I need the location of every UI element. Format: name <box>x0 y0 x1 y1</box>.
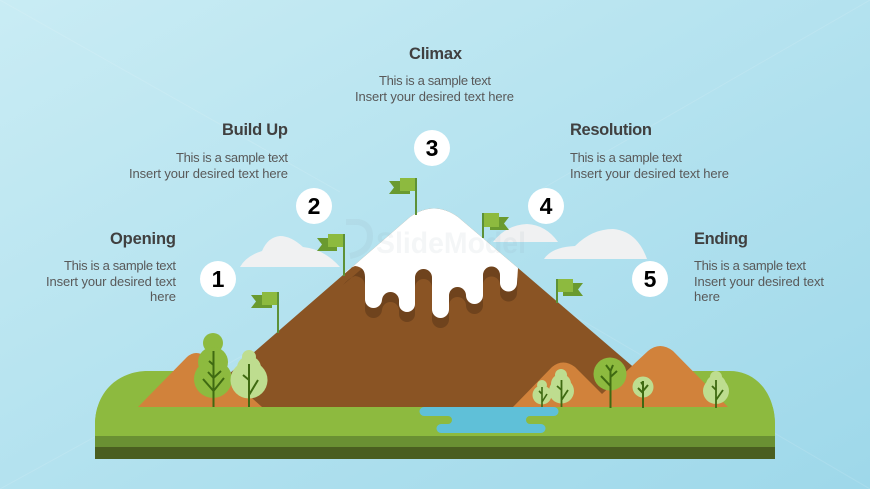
tree 5 <box>594 358 626 408</box>
text: Build Up: Insert your desired text here <box>129 166 288 181</box>
text: Ending: here <box>694 289 720 304</box>
number 5: 5 <box>644 266 657 292</box>
text: Resolution: This is a sample text <box>570 150 682 165</box>
flag 2 <box>317 234 345 276</box>
lake <box>420 407 558 433</box>
grass <box>95 407 775 424</box>
text: Climax: Insert your desired text here <box>355 89 514 104</box>
flag 4 <box>482 213 509 238</box>
ground <box>95 407 775 459</box>
watermark: SlideModel <box>376 227 526 260</box>
cloud left <box>240 236 340 267</box>
tree 6 <box>632 376 654 408</box>
number 3: 3 <box>426 135 438 161</box>
text: Opening: Opening <box>110 230 176 248</box>
text: Resolution: Resolution <box>570 121 652 139</box>
text: Resolution: Insert your desired text here <box>570 166 729 181</box>
text: Climax: Climax <box>409 45 463 63</box>
text: Build Up <box>129 121 288 181</box>
text: Ending: This is a sample text <box>694 258 806 273</box>
number 4 <box>528 188 564 224</box>
tree 4 <box>549 369 574 407</box>
text: Opening: This is a sample text <box>64 258 176 273</box>
number 3 <box>414 130 450 166</box>
text: Climax <box>355 45 514 104</box>
text: Opening <box>46 230 176 304</box>
right orange hills <box>513 346 728 407</box>
text: Build Up: Build Up <box>222 121 288 139</box>
text: Ending: Insert your desired text <box>694 274 824 289</box>
text: Resolution <box>570 121 729 181</box>
back grass hills <box>95 371 775 436</box>
tree 1 <box>194 333 232 407</box>
tree 7 <box>703 371 729 408</box>
tree 2 <box>230 350 268 407</box>
number 1 <box>200 261 236 297</box>
number 4: 4 <box>540 193 553 219</box>
text: Opening: Insert your desired text <box>46 274 176 289</box>
text: Ending <box>694 230 824 304</box>
text: Climax: This is a sample text <box>379 73 491 88</box>
number 1: 1 <box>212 266 225 292</box>
cloud right <box>544 229 647 259</box>
mountain body <box>191 208 680 407</box>
snow shadow <box>344 266 518 328</box>
text: Build Up: This is a sample text <box>176 150 288 165</box>
number 2: 2 <box>308 193 320 219</box>
text: Ending: Ending <box>694 230 748 248</box>
tree 3 <box>532 380 552 407</box>
flag 1 <box>251 292 279 333</box>
number 5 <box>632 261 668 297</box>
soil stripe <box>95 436 775 447</box>
dark soil stripe <box>95 447 775 459</box>
cloud middle <box>493 224 558 242</box>
left orange hill <box>138 353 262 407</box>
flag 3 <box>389 178 417 215</box>
flag 5 <box>556 279 583 303</box>
number 2 <box>296 188 332 224</box>
watermark <box>346 222 526 260</box>
snow cap <box>343 208 518 318</box>
mountain <box>230 208 632 407</box>
text: Opening: here <box>150 289 176 304</box>
